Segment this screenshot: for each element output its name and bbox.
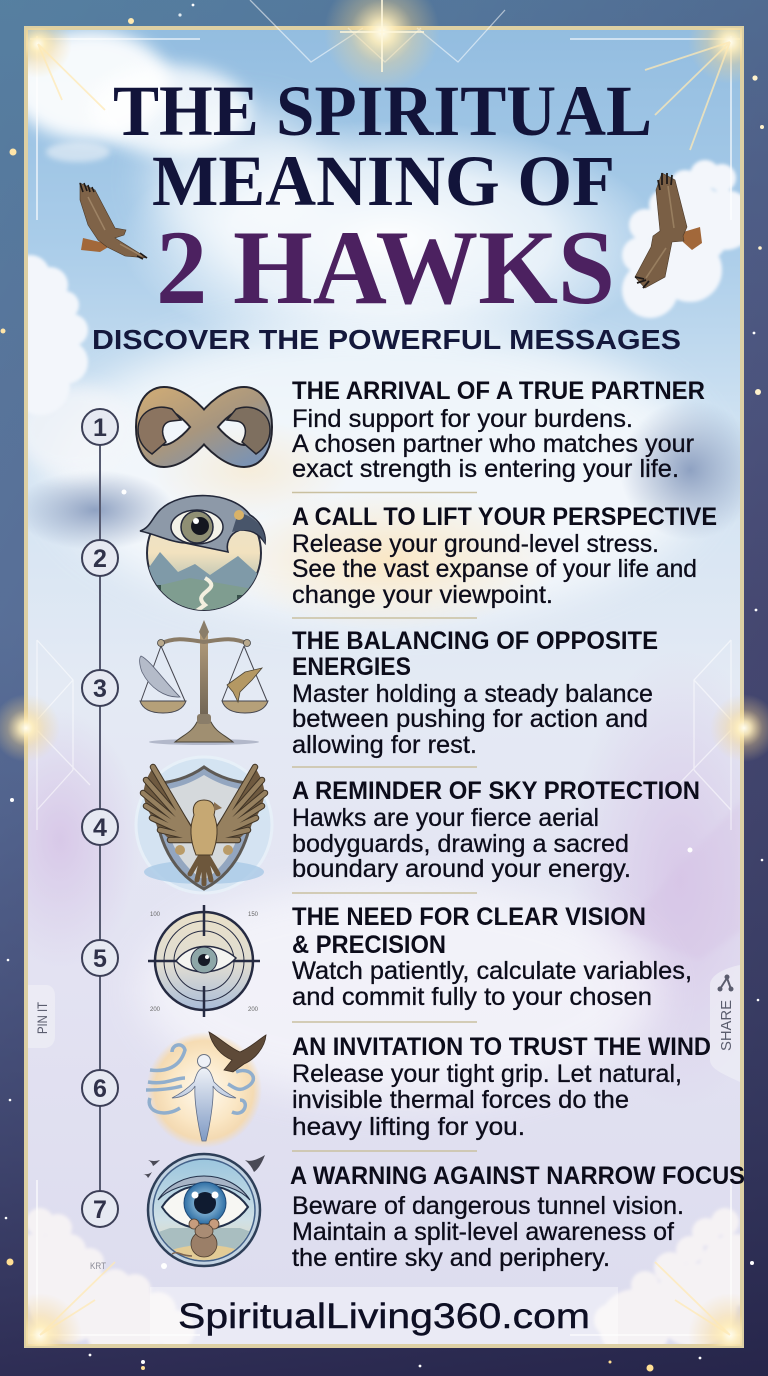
icon: eye reticle: 200	[248, 1007, 259, 1013]
body text: Hawks are your fierce aerial	[292, 804, 599, 832]
footer url: SpiritualLiving360.com	[178, 1297, 590, 1336]
icon: eagle shield	[136, 757, 272, 893]
item 4: protection	[82, 757, 700, 893]
body text	[292, 1060, 682, 1141]
item 5: vision	[82, 903, 692, 1017]
icon: figure in wind with hawk	[146, 1032, 266, 1148]
body text	[292, 405, 694, 483]
body text: and commit fully to your chosen	[292, 983, 652, 1011]
number 6	[82, 1070, 118, 1106]
body text: Release your ground-level stress.	[292, 530, 659, 558]
body text: allowing for rest.	[292, 731, 477, 759]
body text: invisible thermal forces do the	[292, 1086, 629, 1114]
icon: hawk eye landscape	[140, 496, 270, 620]
tab: share: SHARE	[718, 1000, 735, 1051]
body text	[292, 804, 631, 883]
timeline line	[99, 445, 101, 1192]
body text: heavy lifting for you.	[292, 1113, 525, 1141]
icon: eye reticle: 150	[248, 912, 259, 918]
body text: Find support for your burdens.	[292, 405, 633, 433]
heading	[292, 627, 658, 681]
number 3	[82, 670, 118, 706]
heading: A WARNING AGAINST NARROW FOCUS	[290, 1162, 745, 1190]
body text: Watch patiently, calculate variables,	[292, 957, 692, 985]
heading: & PRECISION	[292, 931, 446, 959]
number 3: 3	[93, 675, 107, 703]
number 6: 6	[93, 1075, 107, 1103]
heading: AN INVITATION TO TRUST THE WIND	[292, 1033, 711, 1061]
icon: eye reticle: 200	[150, 1007, 161, 1013]
body text: See the vast expanse of your life and	[292, 555, 697, 583]
body text: Release your tight grip. Let natural,	[292, 1060, 682, 1088]
heading: A CALL TO LIFT YOUR PERSPECTIVE	[292, 503, 717, 531]
clouds: lower right	[594, 1208, 740, 1344]
body text: change your viewpoint.	[292, 581, 553, 609]
item 7: narrow focus	[82, 1154, 745, 1272]
icon: left hawk	[80, 183, 147, 259]
tab: pin it: PIN IT	[34, 1002, 50, 1034]
body text: between pushing for action and	[292, 705, 648, 733]
body text	[292, 530, 697, 609]
body text	[292, 680, 653, 759]
subtitle: DISCOVER THE POWERFUL MESSAGES	[92, 324, 681, 355]
heading: THE NEED FOR CLEAR VISION	[292, 903, 646, 931]
title: 2 HAWKS	[156, 209, 615, 326]
tab: pin it	[28, 985, 55, 1048]
number 1: 1	[93, 414, 107, 442]
footer band	[150, 1287, 618, 1345]
item 2: perspective	[82, 496, 717, 620]
number 1	[82, 409, 118, 445]
title: MEANING OF	[152, 141, 615, 221]
item 1: true partner	[82, 377, 705, 483]
body text: Beware of dangerous tunnel vision.	[292, 1192, 684, 1220]
number 7: 7	[93, 1196, 107, 1224]
body text: Master holding a steady balance	[292, 680, 653, 708]
heading: THE BALANCING OF OPPOSITE	[292, 627, 658, 655]
body text: the entire sky and periphery.	[292, 1244, 610, 1272]
watermark: KRT	[90, 1261, 106, 1271]
number 4	[82, 809, 118, 845]
title: THE SPIRITUAL	[113, 71, 652, 151]
icon: right hawk	[635, 173, 702, 288]
icon: infinity hawks	[138, 398, 270, 456]
number 5: 5	[93, 945, 107, 973]
heading: ENERGIES	[292, 653, 411, 681]
icon: eye reticle: 100	[150, 912, 161, 918]
number 4: 4	[93, 814, 107, 842]
number 2: 2	[93, 545, 107, 573]
body text: Maintain a split-level awareness of	[292, 1218, 674, 1246]
clouds: upper left	[28, 253, 90, 412]
heading: A REMINDER OF SKY PROTECTION	[292, 777, 700, 805]
body text	[292, 957, 692, 1011]
icon: eye with mouse	[143, 1154, 265, 1270]
number 5	[82, 940, 118, 976]
body text: A chosen partner who matches your	[292, 430, 694, 458]
number 7	[82, 1191, 118, 1227]
heading: THE ARRIVAL OF A TRUE PARTNER	[292, 377, 705, 405]
body text: bodyguards, drawing a sacred	[292, 830, 629, 858]
body text: boundary around your energy.	[292, 855, 631, 883]
icon: balance scales	[140, 620, 268, 745]
tab: share	[710, 965, 740, 1082]
body text	[292, 1192, 684, 1272]
item 3: balance	[82, 620, 658, 759]
icon: eye reticle	[148, 905, 260, 1017]
title	[113, 71, 652, 326]
heading	[292, 903, 646, 959]
item 6: trust the wind	[82, 1032, 711, 1148]
clouds: lower left	[28, 1208, 194, 1344]
clouds: upper right	[622, 160, 755, 318]
body text: exact strength is entering your life.	[292, 455, 679, 483]
number 2	[82, 540, 118, 576]
